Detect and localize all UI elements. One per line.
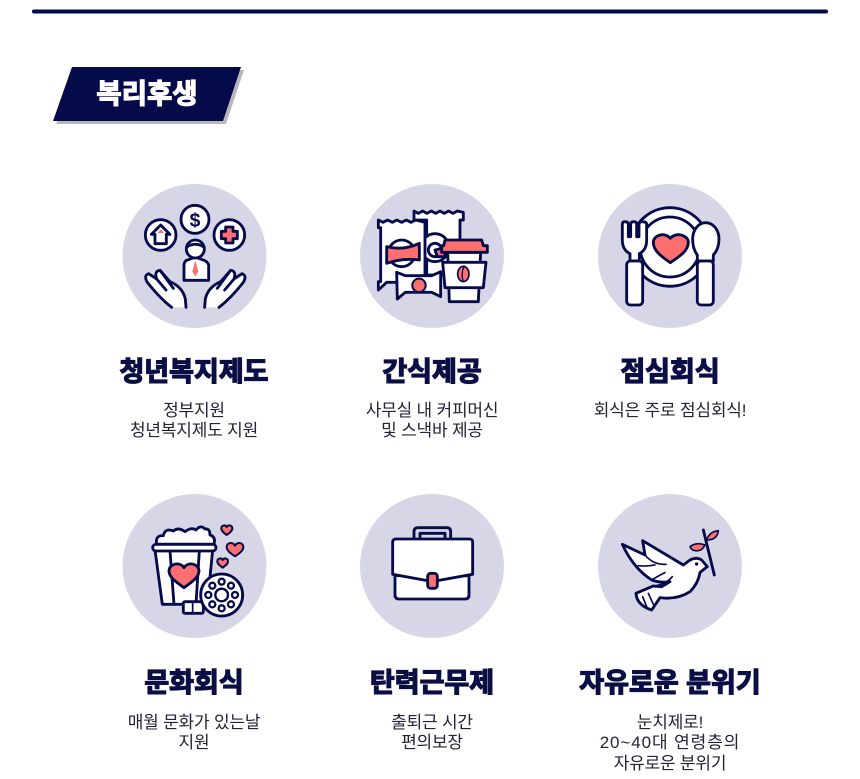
description: flexible hours: 출퇴근 시간 bbox=[391, 713, 473, 732]
description: free atmosphere: 자유로운 분위기 bbox=[614, 754, 726, 773]
heading: culture night: 문화회식 bbox=[144, 668, 244, 698]
panel: flexible hours bbox=[360, 494, 504, 752]
heading: youth welfare: 청년복지제도 bbox=[119, 357, 269, 387]
description: flexible hours: 편의보장 bbox=[401, 733, 463, 752]
description: culture night: 매월 문화가 있는날 bbox=[128, 713, 261, 732]
icon: youth welfare: $ bbox=[190, 210, 201, 231]
heading: flexible hours: 탄력근무제 bbox=[370, 668, 494, 698]
panel: free atmosphere bbox=[579, 494, 761, 773]
panel: youth welfare bbox=[119, 184, 269, 440]
description: free atmosphere: 20~40대 연령층의 bbox=[600, 733, 740, 752]
panel: snacks bbox=[360, 184, 504, 440]
top rule bbox=[32, 10, 828, 14]
panel: culture night bbox=[122, 494, 266, 752]
heading: lunch company dinner: 점심회식 bbox=[620, 357, 720, 387]
description: free atmosphere: 눈치제로! bbox=[637, 713, 703, 732]
icon: snacks bbox=[360, 184, 504, 328]
section heading banner bbox=[53, 67, 244, 124]
description: snacks bbox=[366, 401, 498, 440]
icon: dove with branch bbox=[598, 494, 742, 638]
description: free atmosphere bbox=[600, 713, 740, 773]
panel: lunch company dinner bbox=[594, 184, 746, 420]
description: culture night: 지원 bbox=[179, 733, 209, 752]
description: lunch company dinner: 회식은 주로 점심회식! bbox=[594, 401, 746, 420]
icon: lunch plate bbox=[598, 184, 742, 328]
icon: popcorn and film bbox=[122, 494, 266, 638]
description: flexible hours bbox=[391, 713, 473, 752]
description: youth welfare bbox=[130, 401, 258, 440]
description: youth welfare: 정부지원 bbox=[163, 401, 225, 420]
description: snacks: 사무실 내 커피머신 bbox=[366, 401, 498, 420]
heading: snacks: 간식제공 bbox=[382, 357, 482, 387]
description: snacks: 및 스낵바 제공 bbox=[381, 421, 483, 440]
description: youth welfare: 청년복지제도 지원 bbox=[130, 421, 258, 440]
heading: free atmosphere: 자유로운 분위기 bbox=[579, 668, 761, 698]
section heading banner: 복리후생 bbox=[96, 78, 198, 109]
description: culture night bbox=[128, 713, 261, 752]
icon: youth welfare bbox=[122, 184, 266, 328]
icon: briefcase bbox=[360, 494, 504, 638]
